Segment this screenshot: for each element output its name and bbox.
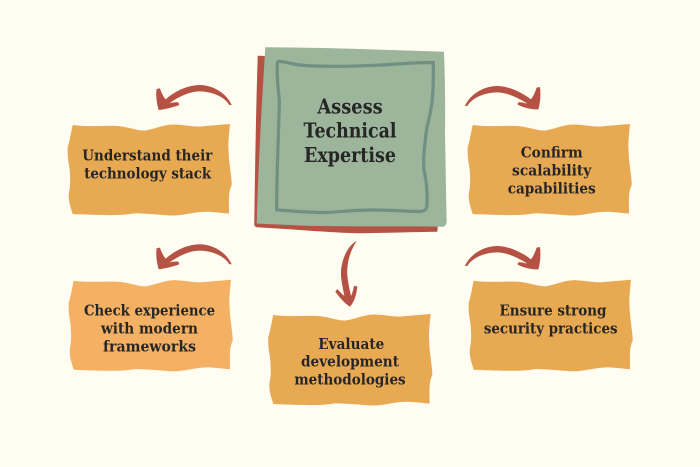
- card text: with modern: [100, 319, 198, 337]
- card text: methodologies: [294, 370, 406, 388]
- title: Expertise: [304, 143, 396, 167]
- panel: check experience: [68, 280, 233, 371]
- card text: [294, 335, 406, 388]
- red backing shape: [254, 56, 440, 233]
- card shape: [68, 124, 232, 216]
- card text: Check experience: [84, 302, 215, 320]
- card text: technology stack: [84, 164, 212, 182]
- inner hand-drawn border: [277, 61, 433, 213]
- card shape: [68, 280, 233, 371]
- panel: confirm scalability: [468, 124, 632, 216]
- arrow: to evaluate methodologies: [335, 241, 357, 307]
- green card: [257, 47, 447, 227]
- card text: [484, 302, 618, 337]
- card text: frameworks: [103, 338, 196, 356]
- arrow: to understand stack: [156, 85, 232, 110]
- arrow: to security practices: [465, 246, 540, 269]
- card text: Understand their: [82, 147, 213, 165]
- card text: [84, 302, 215, 356]
- card shape: [468, 124, 632, 216]
- title: Assess: [316, 94, 383, 118]
- card text: development: [301, 353, 399, 371]
- card text: Ensure strong: [500, 302, 607, 320]
- panel: security practices: [468, 280, 633, 371]
- panel: central card: [254, 47, 447, 233]
- card text: capabilities: [508, 179, 596, 197]
- title: [304, 94, 397, 167]
- card text: [82, 147, 213, 182]
- panel: understand technology stack: [68, 124, 232, 216]
- card text: Evaluate: [318, 335, 384, 353]
- card text: security practices: [484, 319, 618, 337]
- panel: evaluate methodologies: [268, 314, 432, 406]
- card text: [508, 144, 596, 197]
- card shape: [268, 314, 432, 406]
- title: Technical: [304, 119, 397, 143]
- card text: Confirm: [521, 144, 583, 162]
- arrow: to check experience: [156, 244, 232, 269]
- card shape: [468, 280, 633, 371]
- card text: scalability: [512, 162, 593, 180]
- arrow: to confirm scalability: [465, 86, 540, 109]
